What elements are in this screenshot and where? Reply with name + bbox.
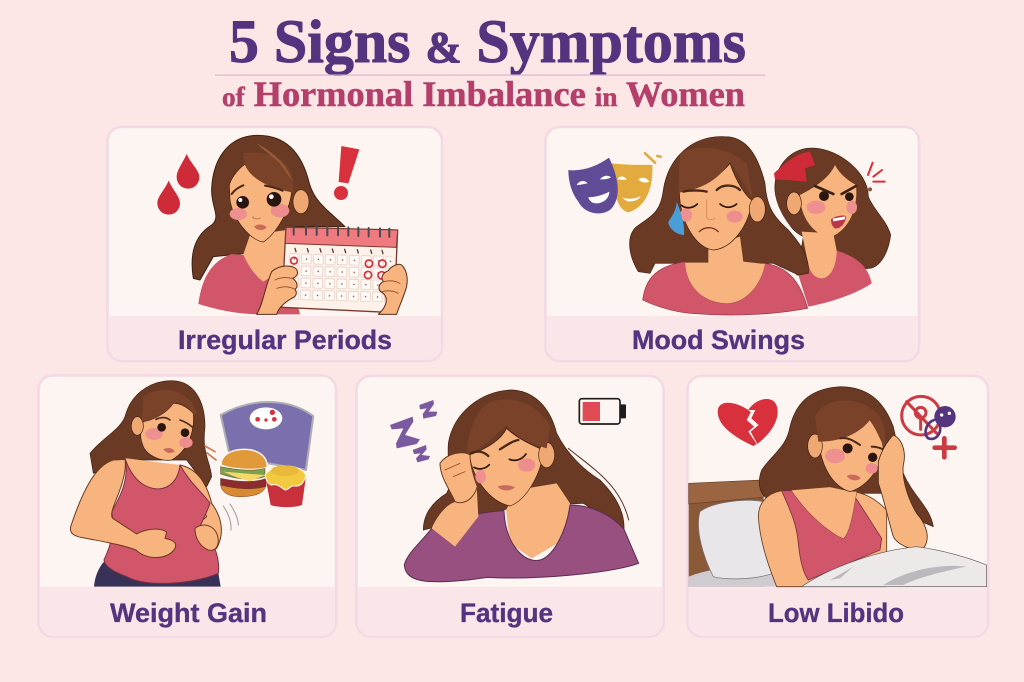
sad woman xyxy=(630,137,809,315)
icon: low battery xyxy=(579,399,626,424)
label: low libido: Low Libido xyxy=(768,598,904,628)
panel: mood swings xyxy=(546,127,919,361)
illustration: worried woman with calendar xyxy=(157,135,407,314)
icon: no libido symbol xyxy=(902,396,956,457)
icon: tear xyxy=(668,202,684,235)
hands holding calendar xyxy=(257,264,407,314)
panel: weight gain xyxy=(38,376,336,636)
label: irregular periods: Irregular Periods xyxy=(178,325,392,355)
panel: low libido xyxy=(688,376,988,636)
label: mood swings: Mood Swings xyxy=(632,325,805,355)
main heading: 5 Signs & Symptoms xyxy=(229,9,746,76)
bed and pillow xyxy=(689,480,780,587)
icon: scale xyxy=(221,402,313,470)
icon: blood drops xyxy=(157,154,199,215)
blanket xyxy=(802,547,987,587)
icon: burger xyxy=(221,449,267,497)
subheading: of Hormonal Imbalance in Women xyxy=(222,74,745,114)
angry woman xyxy=(774,148,891,307)
illustration: sleepy woman xyxy=(390,390,639,582)
icon: fries cup xyxy=(265,465,306,507)
panel: fatigue xyxy=(356,376,664,636)
illustration: sad and angry woman xyxy=(568,137,891,315)
illustration: woman in bed xyxy=(689,387,987,587)
icon: calendar xyxy=(282,227,398,313)
icon: broken heart xyxy=(718,399,778,446)
icon: sleeping Z marks xyxy=(390,400,437,462)
left arm resting on belly xyxy=(70,459,176,558)
label: fatigue: Fatigue xyxy=(460,598,553,628)
icon: exclamation mark xyxy=(334,146,359,200)
illustration: woman holding belly xyxy=(70,381,313,587)
panel: irregular periods xyxy=(108,127,442,361)
label: weight gain: Weight Gain xyxy=(110,598,267,628)
icon: comedy and tragedy masks xyxy=(568,153,661,213)
title block xyxy=(215,9,765,114)
